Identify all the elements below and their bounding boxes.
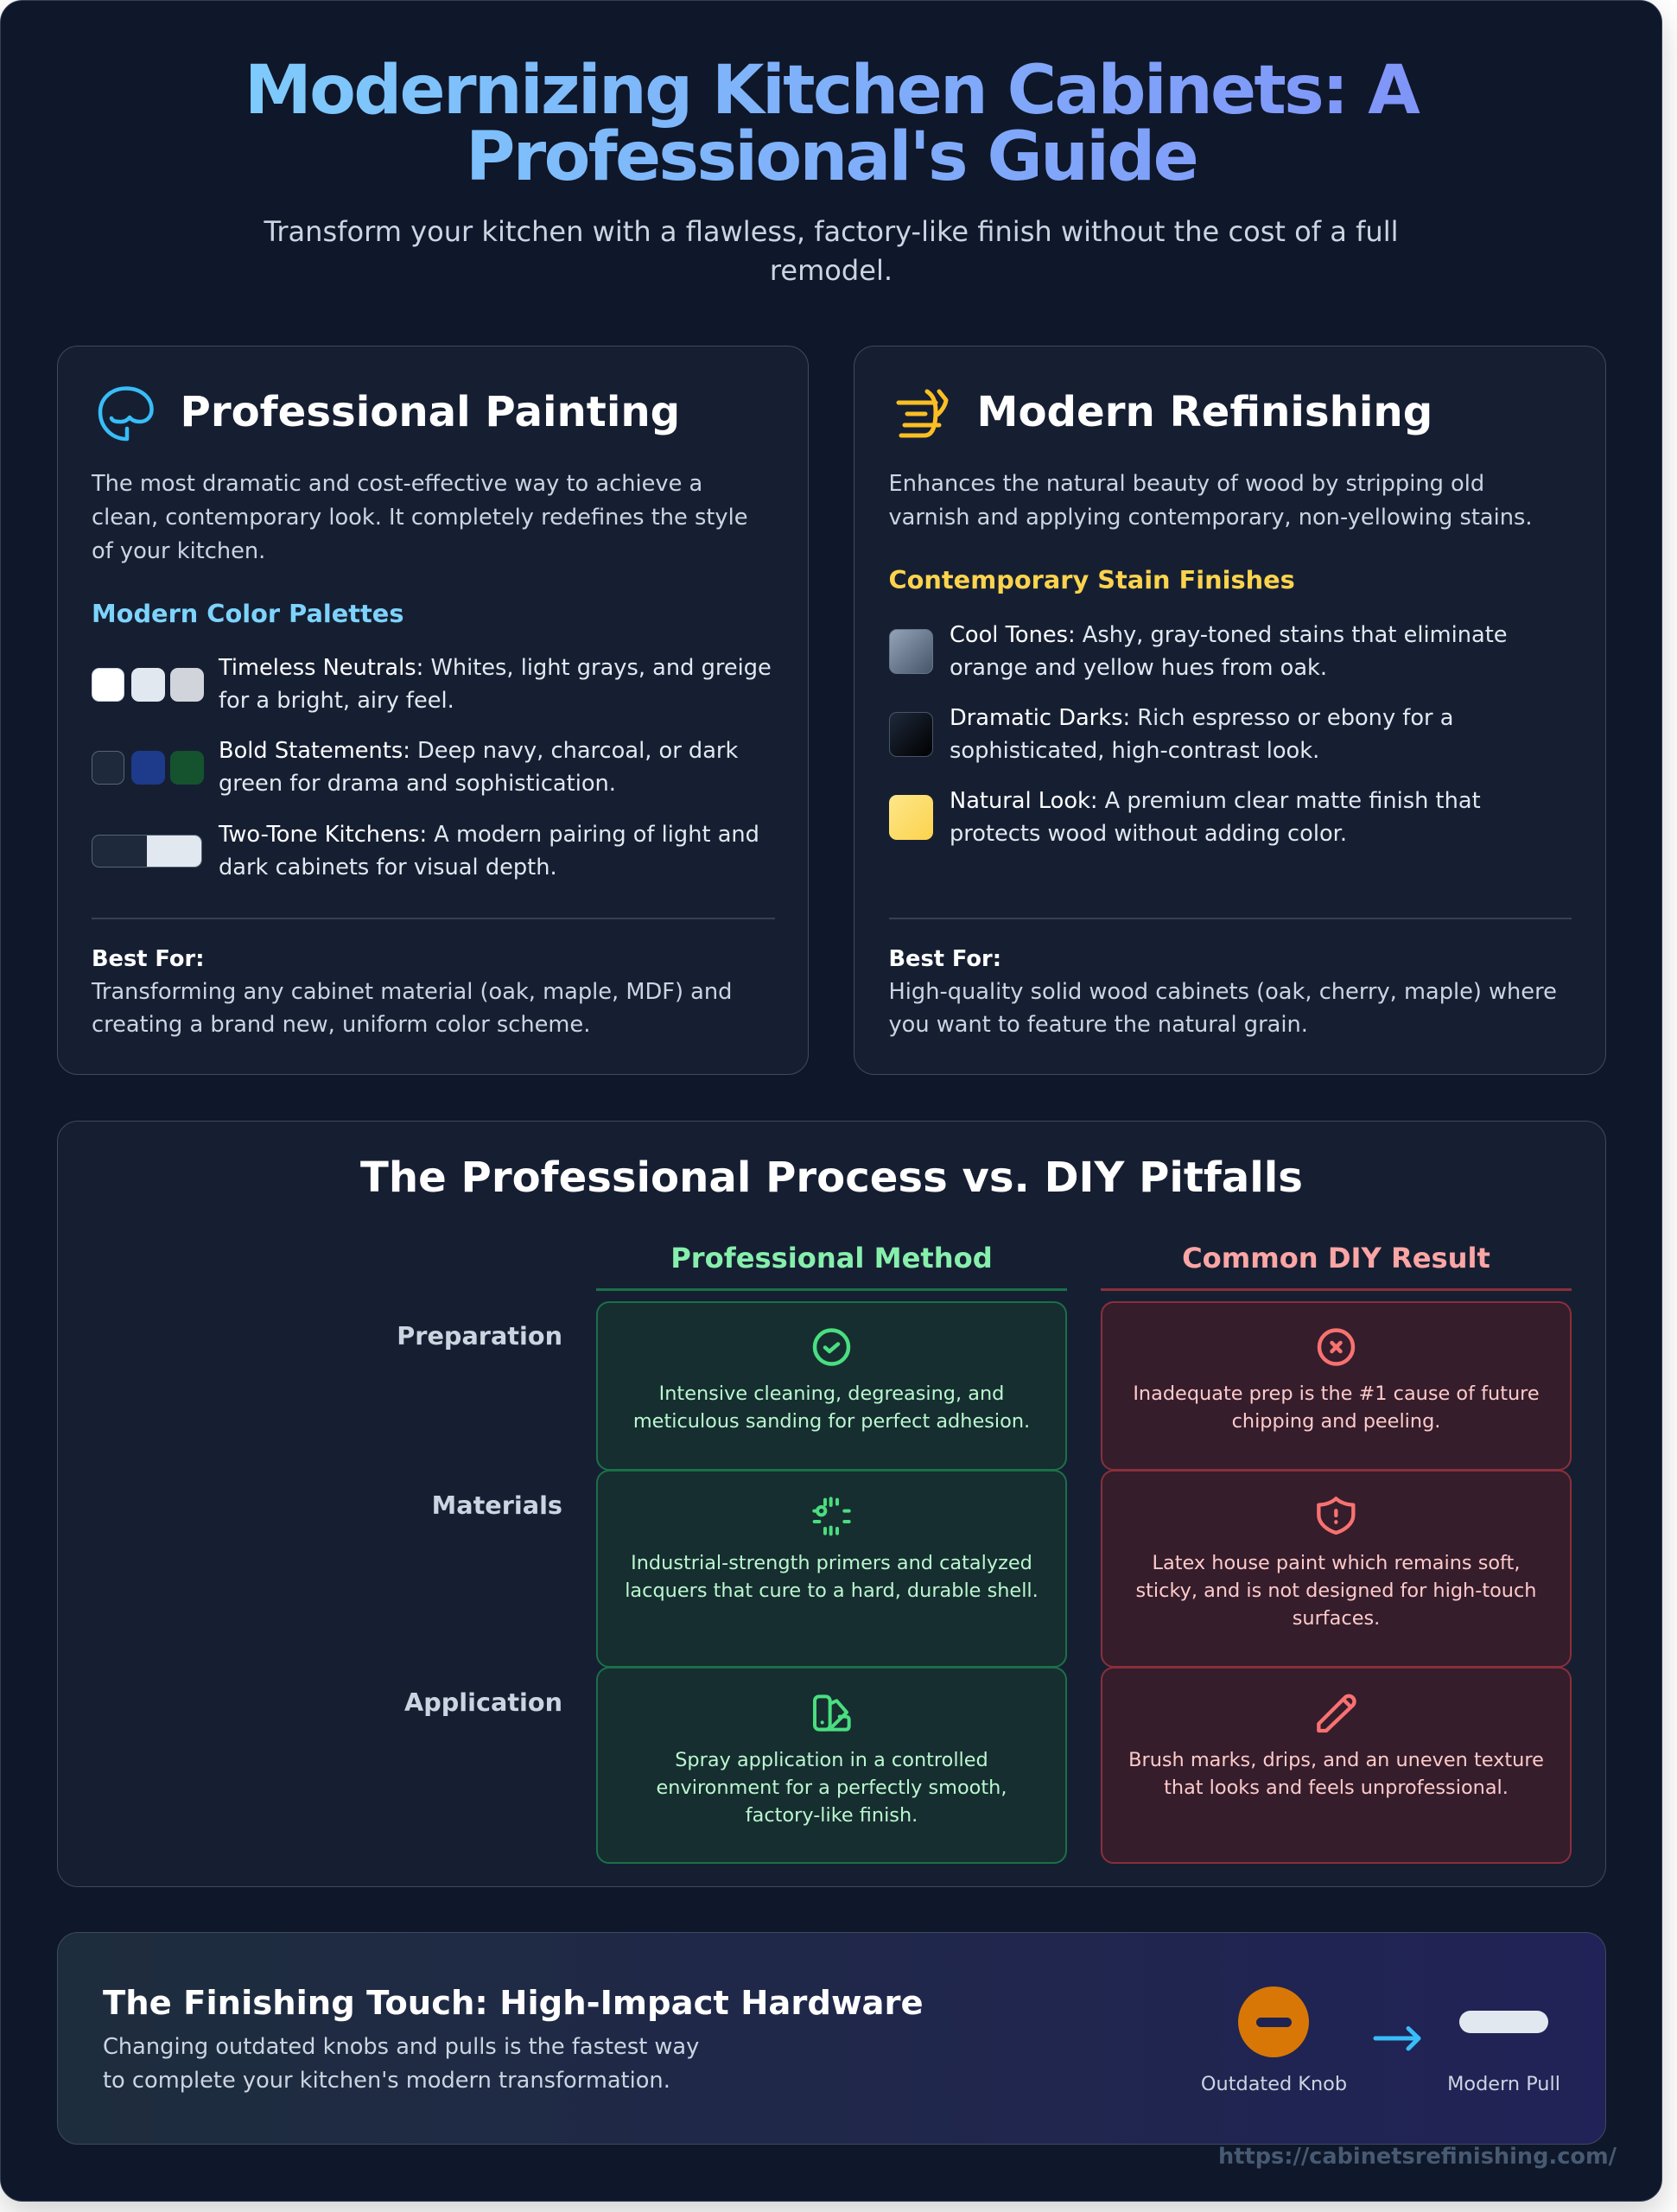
- best for: painting: Transforming any cabinet material (oak, maple, MDF) and: [92, 978, 732, 1004]
- best for: refinishing: Best For:: [888, 945, 1001, 971]
- text: natural look: [950, 788, 1481, 847]
- row label: materials: Materials: [432, 1490, 562, 1519]
- icon: spinner gear: [812, 1497, 851, 1536]
- text: natural look: Natural Look: A premium clear matte finish that: [950, 788, 1481, 814]
- row label: application: Application: [404, 1687, 562, 1716]
- cell: professional materials: [596, 1470, 1067, 1668]
- text: bold statements: Bold Statements: Deep navy, charcoal, or dark: [219, 738, 738, 764]
- cell: diy application: Brush marks, drips, and an uneven texture: [1128, 1749, 1544, 1771]
- icon: modern pull: [1459, 2011, 1548, 2033]
- text: bold statements: green for drama and sophistication.: [219, 771, 616, 797]
- panel: process comparison: [57, 1120, 1606, 1887]
- best for: refinishing: you want to feature the natural grain.: [888, 1011, 1308, 1037]
- heading: process vs pitfalls: The Professional Process vs. DIY Pitfalls: [360, 1154, 1303, 1202]
- panel: hardware banner: [57, 1932, 1606, 2145]
- panel: modern refinishing: [854, 346, 1606, 1075]
- painting description: of your kitchen.: [92, 538, 265, 564]
- cell: professional application: environment for a perfectly smooth,: [657, 1777, 1007, 1799]
- heading: professional painting: Professional Painting: [180, 387, 680, 435]
- swatches: timeless neutrals: [92, 668, 204, 702]
- icon: pencil: [1317, 1694, 1356, 1733]
- text: cool tones: [950, 622, 1508, 681]
- subtitle: Transform your kitchen with a flawless, factory-like finish without the cost of a full: [264, 215, 1399, 248]
- painting description: [92, 471, 747, 564]
- icon: x circle: [1317, 1328, 1355, 1366]
- text: cool tones: orange and yellow hues from oak.: [950, 655, 1327, 681]
- text: two-tone kitchens: dark cabinets for visual depth.: [219, 855, 557, 880]
- text: cool tones: Cool Tones: Ashy, gray-toned stains that eliminate: [950, 622, 1508, 648]
- text: timeless neutrals: [218, 655, 772, 714]
- title: Professional's Guide: [466, 118, 1197, 196]
- text: two-tone kitchens: [218, 821, 759, 880]
- cell: diy materials: sticky, and is not designed for high-touch: [1135, 1580, 1536, 1602]
- icon: palette: [98, 386, 154, 441]
- swatch: dramatic darks: [889, 712, 933, 757]
- icon: swatch book: [813, 1694, 851, 1732]
- cell: professional preparation: meticulous sanding for perfect adhesion.: [633, 1410, 1030, 1433]
- hardware description: [103, 2034, 699, 2094]
- refinishing description: Enhances the natural beauty of wood by stripping old: [888, 471, 1484, 497]
- cell: diy application: [1101, 1667, 1572, 1864]
- text: two-tone kitchens: Two-Tone Kitchens: A modern pairing of light and: [219, 821, 759, 847]
- label: outdated knob: Outdated Knob: [1201, 2073, 1347, 2095]
- icon: outdated knob: [1238, 1986, 1309, 2057]
- cell: diy materials: [1101, 1470, 1572, 1668]
- hardware description: Changing outdated knobs and pulls is the fastest way: [103, 2034, 699, 2060]
- swatch: cool tones: [889, 629, 933, 674]
- subtitle: remodel.: [770, 254, 892, 287]
- heading: finishing touch: The Finishing Touch: High-Impact Hardware: [103, 1984, 924, 2023]
- column header: professional method: Professional Method: [670, 1241, 993, 1274]
- subtitle: [264, 215, 1399, 287]
- refinishing description: [888, 471, 1533, 531]
- arrow: [1374, 2026, 1420, 2051]
- text: bold statements: [219, 738, 738, 797]
- cell: diy preparation: Inadequate prep is the #1 cause of future: [1133, 1382, 1540, 1405]
- best for: painting: creating a brand new, uniform color scheme.: [92, 1011, 590, 1037]
- text: dramatic darks: Dramatic Darks: Rich espresso or ebony for a: [950, 705, 1453, 731]
- best for: painting: Best For:: [92, 945, 204, 971]
- best for: refinishing: [888, 945, 1557, 1037]
- swatch: natural look: [889, 795, 933, 840]
- painting description: The most dramatic and cost-effective way to achieve a: [92, 471, 702, 497]
- source url: https://cabinetsrefinishing.com/: [1218, 2144, 1617, 2170]
- swatches: bold statements: [92, 751, 204, 785]
- cell: diy materials: surfaces.: [1293, 1607, 1380, 1630]
- title: [56, 57, 1606, 190]
- hardware description: to complete your kitchen's modern transformation.: [103, 2068, 670, 2094]
- cell: professional materials: Industrial-strength primers and catalyzed: [631, 1552, 1032, 1574]
- label: modern pull: Modern Pull: [1447, 2073, 1560, 2095]
- cell: diy materials: Latex house paint which remains soft,: [1153, 1552, 1520, 1574]
- icon: brush strokes: [897, 389, 949, 437]
- heading: modern color palettes: Modern Color Palettes: [92, 599, 403, 628]
- text: dramatic darks: [950, 705, 1453, 764]
- swatch: two-tone: [92, 835, 202, 868]
- icon: shield alert: [1317, 1497, 1355, 1535]
- icon: check circle: [812, 1328, 850, 1366]
- cell: professional application: Spray application in a controlled: [675, 1749, 988, 1771]
- cell: professional materials: lacquers that cure to a hard, durable shell.: [625, 1580, 1039, 1602]
- heading: modern refinishing: Modern Refinishing: [976, 387, 1432, 435]
- cell: diy preparation: [1101, 1301, 1572, 1471]
- panel: professional painting: [57, 346, 809, 1075]
- column header: common diy result: [1101, 1241, 1572, 1291]
- title: Modernizing Kitchen Cabinets: A: [245, 51, 1418, 130]
- text: timeless neutrals: Timeless Neutrals: Whites, light grays, and greige: [219, 655, 772, 681]
- cell: diy application: that looks and feels unprofessional.: [1164, 1777, 1509, 1799]
- cell: diy preparation: chipping and peeling.: [1232, 1410, 1440, 1433]
- refinishing description: varnish and applying contemporary, non-yellowing stains.: [888, 505, 1533, 531]
- cell: professional preparation: [596, 1301, 1067, 1471]
- row label: preparation: Preparation: [397, 1320, 562, 1350]
- column header: common diy result: Common DIY Result: [1182, 1241, 1490, 1274]
- best for: refinishing: High-quality solid wood cabinets (oak, cherry, maple) where: [888, 978, 1557, 1004]
- painting description: clean, contemporary look. It completely redefines the style: [92, 505, 747, 531]
- cell: professional application: [596, 1667, 1067, 1864]
- text: dramatic darks: sophisticated, high-contrast look.: [950, 738, 1319, 764]
- best for: painting: [92, 945, 732, 1037]
- cell: professional preparation: Intensive cleaning, degreasing, and: [659, 1382, 1004, 1405]
- heading: contemporary stain finishes: Contemporary Stain Finishes: [888, 565, 1295, 594]
- cell: professional application: factory-like finish.: [746, 1804, 918, 1827]
- column header: professional method: [596, 1241, 1067, 1291]
- text: natural look: protects wood without adding color.: [950, 821, 1347, 847]
- text: timeless neutrals: for a bright, airy feel.: [219, 688, 454, 714]
